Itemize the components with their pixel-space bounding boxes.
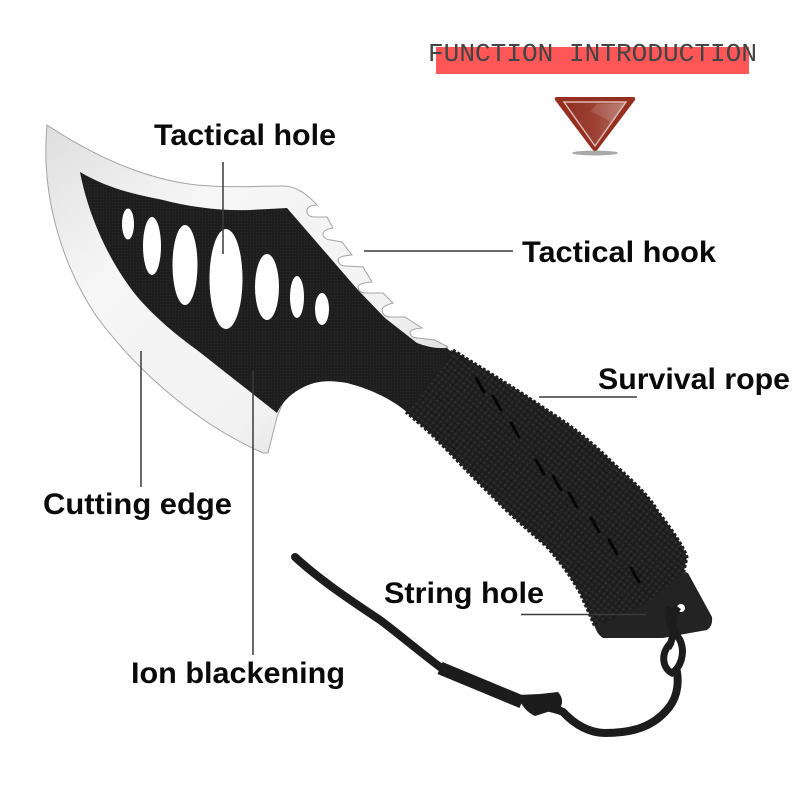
callout: string hole: String hole: [384, 577, 544, 610]
title text: FUNCTION INTRODUCTION: [428, 39, 757, 69]
axe illustration: [46, 125, 712, 733]
callout: cutting edge: Cutting edge: [43, 488, 232, 521]
lanyard loops: [664, 607, 682, 673]
callout: tactical hook: Tactical hook: [522, 236, 716, 269]
callout: survival rope: Survival rope: [598, 363, 790, 396]
lanyard knot: [518, 692, 562, 716]
tactical holes: [122, 208, 329, 329]
callout: tactical hole: Tactical hole: [154, 119, 336, 152]
steel blade with hook teeth: [46, 125, 448, 453]
lanyard cord: [295, 557, 678, 733]
rope shadows: [476, 378, 639, 582]
ion blackened body: [80, 172, 460, 413]
rope-wrapped handle: [407, 350, 687, 627]
callout: ion blackening: Ion blackening: [131, 657, 345, 690]
red highlight bar: [436, 47, 749, 74]
title banner: [428, 39, 757, 74]
icon: down arrow triangle: [555, 97, 635, 156]
string hole: [677, 604, 685, 612]
lanyard doubled section: [440, 668, 522, 702]
pommel cap: [595, 572, 712, 638]
